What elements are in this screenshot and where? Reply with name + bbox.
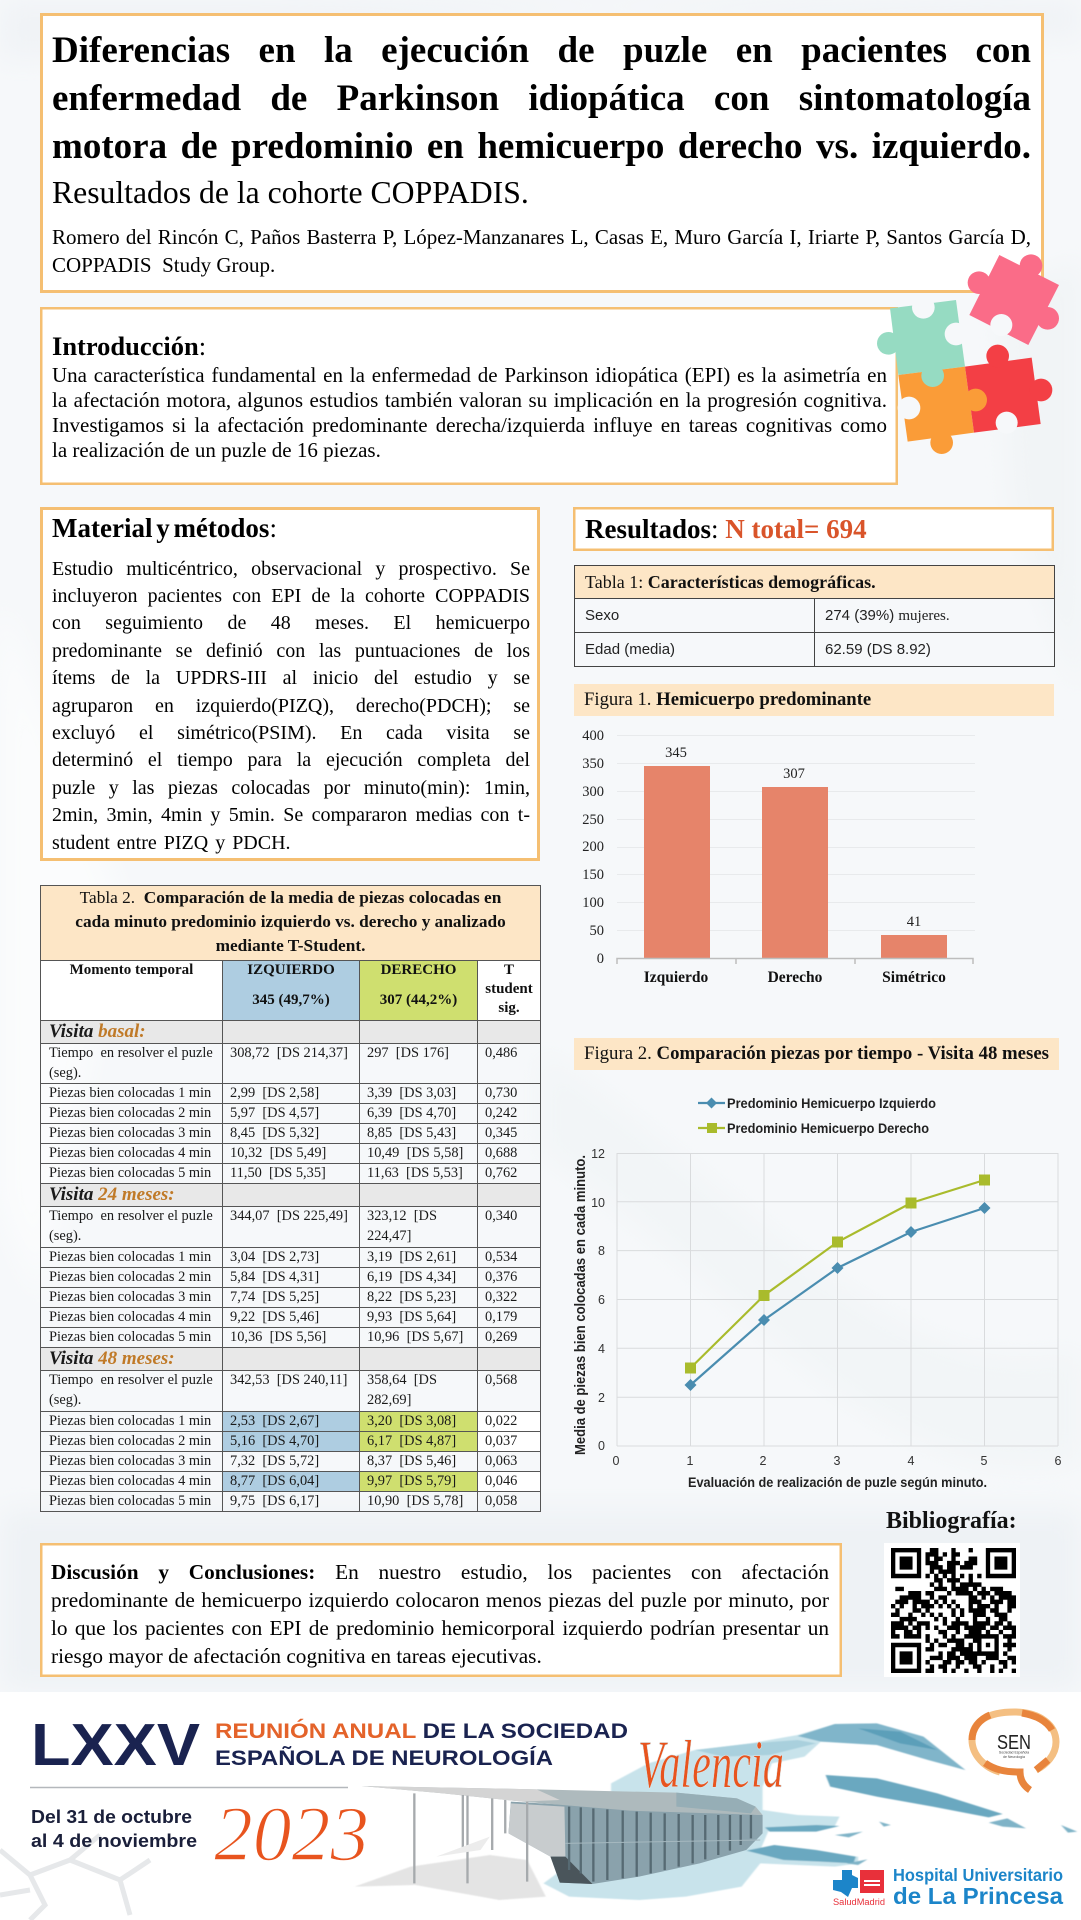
series: izquierdo bbox=[684, 1202, 990, 1391]
caption row: 297 [DS 176] bbox=[367, 1045, 449, 1061]
pink piece bbox=[968, 254, 1059, 345]
pale watercolor wash bbox=[543, 1723, 965, 1900]
series: derecho bbox=[685, 1174, 990, 1374]
text: introducción: Una característica fundamental en la enfermedad de Parkinson idiopática (EPI) es la asimetría en bbox=[52, 363, 887, 387]
heading: introducción: Introducción: bbox=[52, 331, 206, 361]
caption row: 9,75 [DS 6,17] bbox=[230, 1493, 319, 1509]
caption row: 0,037 bbox=[485, 1433, 517, 1449]
caption row: 3,39 [DS 3,03] bbox=[367, 1085, 456, 1101]
caption row: 0,486 bbox=[485, 1045, 517, 1061]
caption row: Piezas bien colocadas 4 min bbox=[49, 1145, 211, 1161]
axis labels: 8 bbox=[598, 1244, 605, 1258]
text: introducción: la realización de un puzle de 16 piezas. bbox=[52, 438, 381, 462]
axis title: y: Media de piezas bien colocadas en cada minuto. bbox=[573, 1155, 589, 1455]
text: introducción: Investigamos si la afectación predominante derecha/izquierda influye en tareas cognitivas como bbox=[52, 413, 887, 437]
y axis labels: 250 bbox=[582, 812, 604, 828]
axis labels: 2 bbox=[598, 1391, 605, 1405]
panel: congress banner bbox=[0, 1692, 1081, 1920]
y axis labels: 300 bbox=[582, 784, 604, 800]
caption row: sig. bbox=[498, 1000, 520, 1016]
caption row: 6,17 [DS 4,87] bbox=[367, 1433, 456, 1449]
caption row: Piezas bien colocadas 1 min bbox=[49, 1085, 211, 1101]
city: Valencia bbox=[638, 1726, 784, 1802]
table 2: comparación de medias bbox=[40, 885, 541, 1512]
caption row: 9,93 [DS 5,64] bbox=[367, 1309, 456, 1325]
bars bbox=[644, 766, 947, 958]
caption row: 0,022 bbox=[485, 1413, 517, 1429]
text: introducción: la afectación motora, algunos estudios también valoran su implicación en la progresión cognitiva. bbox=[52, 388, 887, 412]
authors bbox=[52, 225, 1031, 277]
axis labels: 5 bbox=[981, 1454, 988, 1468]
dates bbox=[31, 1807, 197, 1851]
blue streaks bbox=[798, 1723, 965, 1770]
axis labels: 6 bbox=[1055, 1454, 1062, 1468]
ground bbox=[355, 1855, 546, 1900]
bar values: 345 bbox=[665, 745, 687, 761]
title heading: Diferencias en la ejecución de puzle en pacientes con bbox=[52, 30, 1031, 71]
category labels bbox=[644, 969, 946, 986]
y axis labels bbox=[582, 728, 604, 967]
caption row: 6,19 [DS 4,34] bbox=[367, 1269, 456, 1285]
caption row: 345 (49,7%) bbox=[252, 992, 330, 1008]
table 1: características demográficas: 62.59 (DS 8.92) bbox=[825, 641, 931, 658]
caption row: Piezas bien colocadas 2 min bbox=[49, 1105, 211, 1121]
panel: discusión y conclusiones bbox=[40, 1543, 842, 1677]
bar values: 307 bbox=[783, 766, 805, 782]
legend: Predominio Hemicuerpo Izquierdo bbox=[727, 1096, 936, 1111]
caption row: 308,72 [DS 214,37] bbox=[230, 1045, 348, 1061]
caption row: 10,49 [DS 5,58] bbox=[367, 1145, 463, 1161]
heading: reunión anual: REUNIÓN ANUAL DE LA SOCIEDAD bbox=[215, 1719, 628, 1743]
text: material y métodos: 2min, 3min, 4min y 5min. Se compararon medias con t- bbox=[52, 804, 530, 826]
caption row: 323,12 [DS 224,47] bbox=[367, 1208, 437, 1244]
logo: hospital universitario de la princesa: de La Princesa bbox=[893, 1883, 1063, 1909]
dates: al 4 de noviembre bbox=[31, 1831, 197, 1851]
caption row: Piezas bien colocadas 5 min bbox=[49, 1165, 211, 1181]
text: discusión y conclusiones: Discusión y Conclusiones: En nuestro estudio, los pacientes con afectación bbox=[51, 1560, 829, 1584]
axis title: x: Evaluación de realización de puzle según minuto. bbox=[688, 1474, 987, 1490]
table 1: características demográficas: Sexo bbox=[585, 607, 619, 624]
caption row: Piezas bien colocadas 4 min bbox=[49, 1309, 211, 1325]
caption row: Visita basal: bbox=[49, 1021, 146, 1042]
illustration: neuron branches bbox=[0, 1835, 150, 1920]
caption row: 0,730 bbox=[485, 1085, 517, 1101]
caption row: Piezas bien colocadas 5 min bbox=[49, 1329, 211, 1345]
caption row: 0,345 bbox=[485, 1125, 517, 1141]
y axis labels: 400 bbox=[582, 728, 604, 744]
text: discusión y conclusiones: riesgo mayor de afectación cognitiva en tareas ejecutivas. bbox=[51, 1644, 542, 1668]
caption row: Piezas bien colocadas 4 min bbox=[49, 1473, 211, 1489]
table 1: características demográficas bbox=[574, 565, 1055, 667]
logo: hospital universitario de la princesa: SaludMadrid bbox=[833, 1897, 885, 1907]
bar values: 41 bbox=[907, 914, 921, 930]
category labels: Derecho bbox=[768, 969, 823, 986]
text: introducción bbox=[52, 363, 887, 462]
caption row: DERECHO bbox=[381, 962, 456, 978]
text: material y métodos: con seguimiento de 48 meses. El hemicuerpo bbox=[52, 612, 530, 634]
caption row: student bbox=[485, 981, 533, 997]
subtitle: Resultados de la cohorte COPPADIS. bbox=[52, 175, 529, 210]
legend bbox=[698, 1096, 936, 1136]
text: material y métodos: agruparon en izquierdo(PIZQ), derecho(PDCH); se bbox=[52, 695, 530, 717]
axis labels: 4 bbox=[908, 1454, 915, 1468]
facade bbox=[509, 1802, 763, 1884]
mint piece bbox=[877, 300, 965, 375]
caption row: 0,340 bbox=[485, 1208, 517, 1224]
caption row: 5,97 [DS 4,57] bbox=[230, 1105, 319, 1121]
authors: COPPADIS Study Group. bbox=[52, 253, 275, 277]
caption row: 9,97 [DS 5,79] bbox=[367, 1473, 456, 1489]
axis labels: 3 bbox=[834, 1454, 841, 1468]
caption row: 3,20 [DS 3,08] bbox=[367, 1413, 456, 1429]
title heading: enfermedad de Parkinson idiopática con sintomatología bbox=[52, 78, 1031, 119]
panel: material y métodos bbox=[40, 507, 540, 861]
caption row: 0,376 bbox=[485, 1269, 517, 1285]
caption row: 307 (44,2%) bbox=[380, 992, 457, 1008]
y axis labels: 50 bbox=[590, 923, 604, 939]
axis labels bbox=[591, 1147, 1062, 1468]
logo: SEN bbox=[972, 1712, 1056, 1790]
icon: puzzle pieces bbox=[877, 254, 1059, 454]
table 1: características demográficas: 274 (39%) mujeres. bbox=[825, 606, 950, 624]
category labels: Simétrico bbox=[882, 969, 946, 986]
illustration: watercolor and building bbox=[355, 1723, 1077, 1900]
heading: material y métodos: Material y métodos: bbox=[52, 513, 277, 543]
caption row: 3,04 [DS 2,73] bbox=[230, 1249, 319, 1265]
year: 2023 bbox=[214, 1790, 369, 1877]
caption row: 342,53 [DS 240,11] bbox=[230, 1372, 347, 1388]
heading: figura 1 bbox=[574, 684, 1054, 716]
caption row: 8,77 [DS 6,04] bbox=[230, 1473, 319, 1489]
caption row: Piezas bien colocadas 3 min bbox=[49, 1125, 211, 1141]
caption row: cada minuto predominio izquierdo vs. derecho y analizado bbox=[75, 912, 506, 931]
title heading: motora de predominio en hemicuerpo derecho vs. izquierdo. bbox=[52, 126, 1031, 167]
dates: Del 31 de octubre bbox=[31, 1807, 192, 1827]
caption row: Piezas bien colocadas 2 min bbox=[49, 1433, 211, 1449]
heading: LXXV: LXXV bbox=[31, 1712, 200, 1778]
y axis labels: 200 bbox=[582, 839, 604, 855]
panel: introducción bbox=[40, 307, 898, 485]
heading: reunión anual bbox=[215, 1719, 628, 1770]
heading: bibliografía: Bibliografía: bbox=[886, 1508, 1017, 1534]
caption row: 0,242 bbox=[485, 1105, 517, 1121]
caption row bbox=[41, 886, 540, 1509]
panel: title bbox=[40, 13, 1044, 293]
axis labels: 10 bbox=[591, 1196, 605, 1210]
text: material y métodos: incluyeron pacientes con EPI de la cohorte COPPADIS bbox=[52, 585, 530, 607]
logo: SEN: de Neurología bbox=[1003, 1755, 1025, 1759]
text: material y métodos: determinó el tiempo para la ejecución completa del bbox=[52, 749, 530, 771]
caption row: 0,179 bbox=[485, 1309, 517, 1325]
caption row: Piezas bien colocadas 2 min bbox=[49, 1269, 211, 1285]
text: material y métodos bbox=[52, 558, 530, 854]
axis labels: 6 bbox=[598, 1293, 605, 1307]
caption row: 0,063 bbox=[485, 1453, 517, 1469]
caption row: 0,058 bbox=[485, 1493, 517, 1509]
caption row: 5,16 [DS 4,70] bbox=[230, 1433, 319, 1449]
heading: figura 1: Figura 1. Hemicuerpo predominante bbox=[584, 689, 871, 710]
caption row: Piezas bien colocadas 3 min bbox=[49, 1289, 211, 1305]
caption row: 0,269 bbox=[485, 1329, 517, 1345]
caption row: 358,64 [DS 282,69] bbox=[367, 1372, 437, 1408]
caption row: 11,63 [DS 5,53] bbox=[367, 1165, 463, 1181]
heading: figura 2 bbox=[574, 1038, 1059, 1070]
caption row: Tabla 2. Comparación de la media de piezas colocadas en bbox=[80, 888, 501, 907]
roof bbox=[362, 1786, 763, 1815]
y axis labels: 100 bbox=[582, 895, 604, 911]
caption row: 11,50 [DS 5,35] bbox=[230, 1165, 326, 1181]
caption row: 8,22 [DS 5,23] bbox=[367, 1289, 456, 1305]
caption row: 0,322 bbox=[485, 1289, 517, 1305]
text: material y métodos: ítems de la UPDRS-III al inicio del estudio y se bbox=[52, 667, 530, 689]
caption row: Visita 48 meses: bbox=[49, 1348, 175, 1369]
caption row: Visita 24 meses: bbox=[49, 1184, 175, 1205]
text: material y métodos: puzle y las piezas colocadas por minuto(min): 1min, bbox=[52, 777, 530, 799]
caption row: 0,688 bbox=[485, 1145, 517, 1161]
caption row: Tiempo en resolver el puzle (seg). bbox=[49, 1372, 213, 1408]
title heading bbox=[52, 30, 1031, 167]
caption row: 5,84 [DS 4,31] bbox=[230, 1269, 319, 1285]
heading: figura 2: Figura 2. Comparación piezas por tiempo - Visita 48 meses bbox=[584, 1043, 1049, 1064]
caption row: 2,53 [DS 2,67] bbox=[230, 1413, 319, 1429]
y axis labels: 0 bbox=[597, 951, 604, 967]
caption row: 0,534 bbox=[485, 1249, 517, 1265]
caption row: 0,046 bbox=[485, 1473, 517, 1489]
caption row: Piezas bien colocadas 3 min bbox=[49, 1453, 211, 1469]
heading: reunión anual: ESPAÑOLA DE NEUROLOGÍA bbox=[215, 1747, 553, 1770]
logo: hospital universitario de la princesa: Hospital Universitario bbox=[893, 1865, 1063, 1885]
axis labels: 4 bbox=[598, 1342, 605, 1356]
authors: Romero del Rincón C, Paños Basterra P, López-Manzanares L, Casas E, Muro García I, Iriarte P, Santos García D, bbox=[52, 225, 1031, 249]
text: material y métodos: excluyó el simétrico(PSIM). En cada visita se bbox=[52, 722, 530, 744]
caption row: T bbox=[504, 962, 514, 978]
caption row: Momento temporal bbox=[70, 962, 193, 978]
caption row: Tiempo en resolver el puzle (seg). bbox=[49, 1045, 213, 1081]
axis labels: 2 bbox=[760, 1454, 767, 1468]
caption row: 3,19 [DS 2,61] bbox=[367, 1249, 456, 1265]
bar values bbox=[665, 745, 921, 930]
panel: resultados bbox=[573, 507, 1054, 551]
text: material y métodos: student entre PIZQ y PDCH. bbox=[52, 832, 291, 854]
legend: Predominio Hemicuerpo Derecho bbox=[727, 1121, 929, 1136]
caption row: Piezas bien colocadas 1 min bbox=[49, 1249, 211, 1265]
caption row: 10,96 [DS 5,67] bbox=[367, 1329, 463, 1345]
caption row: 6,39 [DS 4,70] bbox=[367, 1105, 456, 1121]
category labels: Izquierdo bbox=[644, 969, 709, 986]
caption row: 0,568 bbox=[485, 1372, 517, 1388]
caption row: 7,74 [DS 5,25] bbox=[230, 1289, 319, 1305]
caption row: 10,32 [DS 5,49] bbox=[230, 1145, 326, 1161]
text: discusión y conclusiones: lo que los pacientes con EPI de predominio hemicorporal izquierdo podrían presentar un bbox=[51, 1616, 829, 1640]
axis labels: 1 bbox=[687, 1454, 694, 1468]
caption row: 2,99 [DS 2,58] bbox=[230, 1085, 319, 1101]
caption row: 344,07 [DS 225,49] bbox=[230, 1208, 348, 1224]
text: material y métodos: predominante se definió con las puntuaciones de los bbox=[52, 640, 530, 662]
y axis labels: 150 bbox=[582, 867, 604, 883]
caption row: 10,36 [DS 5,56] bbox=[230, 1329, 326, 1345]
caption row: Piezas bien colocadas 5 min bbox=[49, 1493, 211, 1509]
caption row: 10,90 [DS 5,78] bbox=[367, 1493, 463, 1509]
logo: hospital universitario de la princesa bbox=[833, 1865, 1063, 1909]
icon: QR code bbox=[884, 1543, 1020, 1677]
caption row: 7,32 [DS 5,72] bbox=[230, 1453, 319, 1469]
logo: SEN: Sociedad Española bbox=[999, 1750, 1029, 1754]
axis labels: 0 bbox=[613, 1454, 620, 1468]
text: discusión y conclusiones: predominante de hemicuerpo izquierdo colocaron menos piezas del puzle por minuto, por bbox=[51, 1588, 829, 1612]
caption row: Piezas bien colocadas 1 min bbox=[49, 1413, 211, 1429]
y axis labels: 350 bbox=[582, 756, 604, 772]
table 1: características demográficas: Tabla 1: Características demográficas. bbox=[585, 572, 876, 592]
text: material y métodos: Estudio multicéntrico, observacional y prospectivo. Se bbox=[52, 558, 530, 580]
caption row: 8,85 [DS 5,43] bbox=[367, 1125, 456, 1141]
logo: SEN: SEN bbox=[997, 1732, 1031, 1754]
heading: resultados: Resultados: N total= 694 bbox=[585, 514, 867, 544]
red piece bbox=[965, 345, 1052, 433]
caption row: 8,37 [DS 5,46] bbox=[367, 1453, 456, 1469]
columns bbox=[414, 1793, 527, 1883]
caption row: IZQUIERDO bbox=[247, 962, 335, 978]
caption row: 0,762 bbox=[485, 1165, 517, 1181]
text: discusión y conclusiones bbox=[51, 1560, 829, 1668]
orange piece bbox=[898, 367, 974, 442]
caption row: 8,45 [DS 5,32] bbox=[230, 1125, 319, 1141]
table 1: características demográficas: Edad (media) bbox=[585, 641, 675, 658]
caption row: Tiempo en resolver el puzle (seg). bbox=[49, 1208, 213, 1244]
axis labels: 12 bbox=[591, 1147, 605, 1161]
caption row: mediante T-Student. bbox=[216, 936, 365, 955]
caption row: 9,22 [DS 5,46] bbox=[230, 1309, 319, 1325]
axis labels: 0 bbox=[598, 1439, 605, 1453]
